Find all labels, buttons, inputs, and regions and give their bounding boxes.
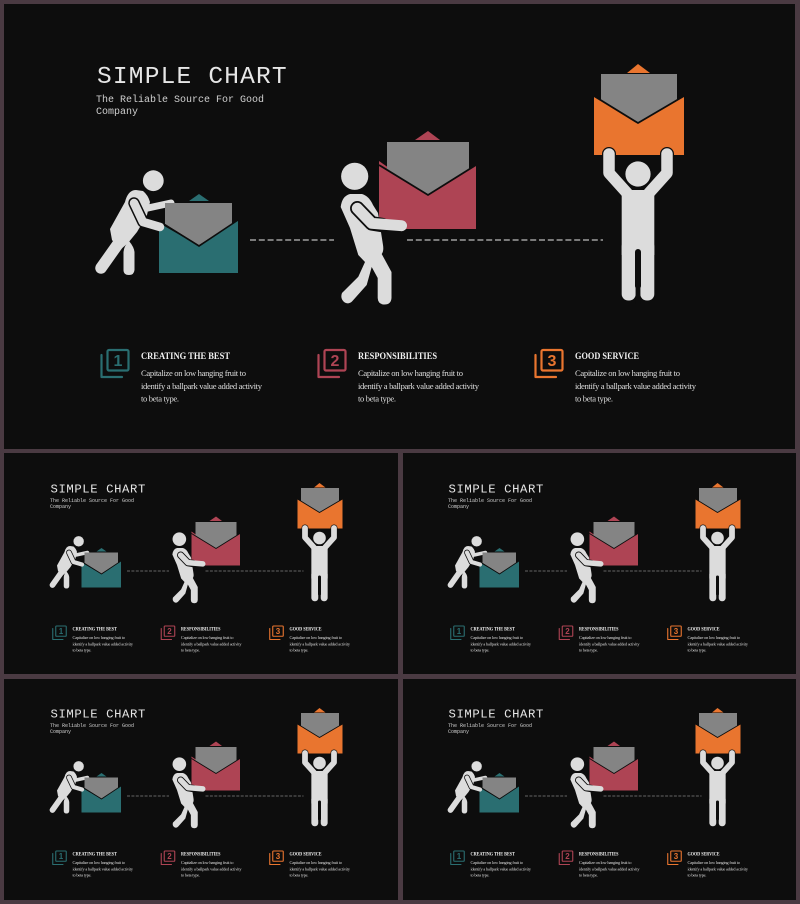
figure carrying red envelope [341,131,476,304]
panel: thumbnail bottom right [403,679,796,900]
thumbnail content: The Reliable Source For Good [50,723,134,729]
thumbnail content: The Reliable Source For Good [448,723,532,729]
item: responsibilities: RESPONSIBILITIES [358,351,437,362]
thumbnail content: Capitalize on low hanging fruit to [72,635,125,640]
item: good service: GOOD SERVICE [575,351,639,362]
thumbnail content: Company [448,504,469,510]
thumbnail content: to beta type. [290,648,308,653]
item: creating the best: identify a ballpark value added activity [141,381,263,391]
thumbnail content: RESPONSIBILITIES [181,628,221,632]
thumbnail content: to beta type. [72,648,92,653]
thumbnail content [448,708,749,878]
item: responsibilities: to beta type. [358,393,396,403]
subtitle: The Reliable Source For Good [96,94,264,106]
thumbnail content: SIMPLE CHART [50,482,146,496]
thumbnail content: The Reliable Source For Good [448,498,532,504]
item: creating the best [141,351,263,403]
icon: number 3: 3 [548,353,557,370]
thumbnail content: identify a ballpark value added activity [470,642,532,646]
thumbnail content: Capitalize on low hanging fruit to [688,635,740,640]
thumbnail content [50,482,351,653]
thumbnail content: 1 [59,852,64,861]
thumbnail content: to beta type. [470,873,490,878]
thumbnail content: Company [50,729,71,735]
item: good service: to beta type. [575,393,613,403]
thumbnail content: to beta type. [72,873,92,878]
item: creating the best: Capitalize on low hanging fruit to [141,368,246,378]
thumbnail content: 2 [167,627,172,636]
thumbnail content: The Reliable Source For Good [50,498,134,504]
thumbnail content: 1 [59,627,64,636]
thumbnail content: to beta type. [181,648,200,653]
item: creating the best: to beta type. [141,393,179,403]
thumbnail content: identify a ballpark value added activity [181,866,242,872]
thumbnail content: identify a ballpark value added activity [72,866,134,872]
thumbnail content: CREATING THE BEST [72,852,118,858]
thumbnail content: identify a ballpark value added activity [181,642,242,646]
subtitle [96,94,264,118]
thumbnail content: 3 [276,852,281,861]
thumbnail content: identify a ballpark value added activity [688,642,749,646]
thumbnail content: to beta type. [688,873,706,878]
thumbnail content: CREATING THE BEST [72,628,118,632]
thumbnail content: Capitalize on low hanging fruit to [688,860,740,865]
thumbnail content: Capitalize on low hanging fruit to [290,635,342,640]
thumbnail content: CREATING THE BEST [470,852,516,858]
panel: thumbnail bottom left [4,679,398,900]
thumbnail content: SIMPLE CHART [448,708,544,722]
thumbnail content: SIMPLE CHART [50,708,146,722]
thumbnail content: GOOD SERVICE [688,628,720,632]
thumbnail content: identify a ballpark value added activity [470,866,532,872]
thumbnail content: to beta type. [579,873,598,878]
thumbnail content: identify a ballpark value added activity [579,866,640,872]
thumbnail content: Capitalize on low hanging fruit to [181,860,234,865]
item: responsibilities: identify a ballpark value added activity [358,381,480,391]
figure pushing teal envelope [101,170,238,275]
thumbnail content: Capitalize on low hanging fruit to [181,635,234,640]
thumbnail content: Capitalize on low hanging fruit to [290,860,342,865]
subtitle: Company [96,107,138,118]
thumbnail content: 1 [457,627,462,636]
thumbnail content: Company [448,729,469,735]
item: good service: identify a ballpark value added activity [575,381,697,391]
item: responsibilities: Capitalize on low hanging fruit to [358,368,463,378]
icon: number 3 [536,350,562,377]
icon: number 1 [102,350,128,377]
thumbnail content: identify a ballpark value added activity [290,866,351,872]
item: good service: Capitalize on low hanging fruit to [575,368,680,378]
dashed connectors [250,239,603,241]
icon: number 1: 1 [114,353,123,370]
thumbnail content: Capitalize on low hanging fruit to [470,860,523,865]
panel: main slide [4,4,795,449]
thumbnail content: to beta type. [688,648,706,653]
thumbnail content [448,482,749,653]
thumbnail content: 2 [167,852,172,861]
thumbnail content: GOOD SERVICE [290,852,322,858]
thumbnail content: to beta type. [579,648,598,653]
thumbnail content: CREATING THE BEST [470,628,516,632]
figure lifting orange envelope [594,64,684,304]
thumbnail content: to beta type. [181,873,200,878]
panel: thumbnail top right [403,453,796,674]
thumbnail content: Company [50,504,71,510]
thumbnail content: Capitalize on low hanging fruit to [579,635,632,640]
icon: number 2: 2 [331,353,340,370]
thumbnail content: Capitalize on low hanging fruit to [470,635,523,640]
panel: thumbnail top left [4,453,398,674]
item: good service [575,351,697,403]
thumbnail content: GOOD SERVICE [290,628,322,632]
title: SIMPLE CHART [97,64,288,91]
thumbnail content [50,708,351,878]
icon: number 2 [318,350,346,377]
thumbnail content: identify a ballpark value added activity [579,642,640,646]
thumbnail content: 3 [674,852,679,861]
thumbnail content: to beta type. [470,648,490,653]
thumbnail content: 2 [565,852,570,861]
thumbnail content: 2 [565,627,570,636]
thumbnail content: identify a ballpark value added activity [688,866,749,872]
thumbnail content: RESPONSIBILITIES [181,852,221,858]
thumbnail content: Capitalize on low hanging fruit to [72,860,125,865]
thumbnail content: GOOD SERVICE [688,852,720,858]
thumbnail content: identify a ballpark value added activity [72,642,134,646]
thumbnail content: SIMPLE CHART [448,482,544,496]
thumbnail content: 3 [276,627,281,636]
item: responsibilities [358,351,480,403]
thumbnail content: identify a ballpark value added activity [290,642,351,646]
thumbnail content: Capitalize on low hanging fruit to [579,860,632,865]
thumbnail content: RESPONSIBILITIES [579,628,619,632]
thumbnail content: to beta type. [290,873,308,878]
thumbnail content: 3 [674,627,679,636]
item: creating the best: CREATING THE BEST [141,351,231,362]
thumbnail content: RESPONSIBILITIES [579,852,619,858]
thumbnail content: 1 [457,852,462,861]
